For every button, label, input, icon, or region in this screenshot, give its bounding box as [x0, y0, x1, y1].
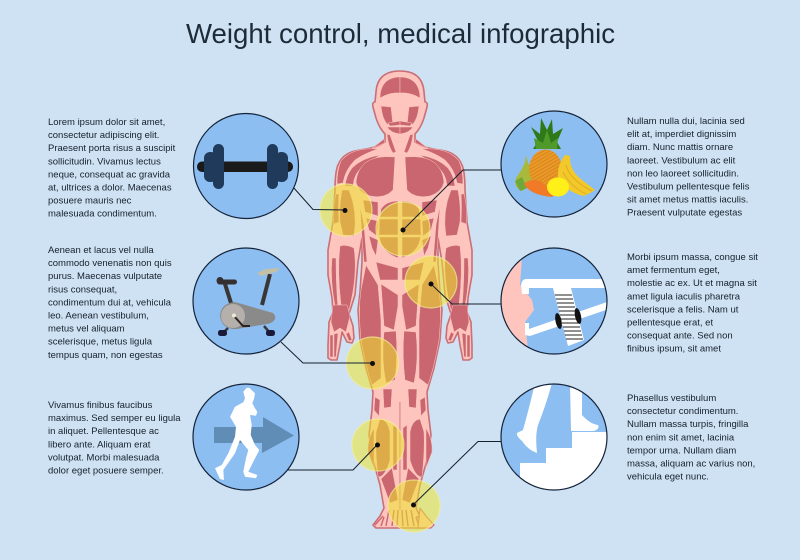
- text block: middle left: metus vel aliquam: [48, 324, 125, 335]
- text block: bottom left: Vivamus finibus faucibus: [48, 400, 153, 411]
- text block: top right: non leo laoreet sollicitudin.: [627, 168, 739, 179]
- text block: bottom right: consectetur condimentum.: [627, 406, 738, 417]
- text block: top left: Praesent porta risus a suscipit: [48, 143, 176, 154]
- text block: middle left: Aenean et lacus vel nulla: [48, 245, 154, 256]
- text block: middle right: amet fermentum eget,: [627, 265, 720, 276]
- leader line dots: [342, 208, 434, 508]
- icon: runner with arrow: [193, 384, 299, 490]
- text block: bottom left: volutpat. Morbi malesuada: [48, 452, 160, 463]
- text block: middle left: scelerisque, metus ligula: [48, 337, 153, 348]
- text block: middle right: amet ligula iaculis pharetra: [627, 291, 741, 302]
- text block: middle left: condimentum dui at, vehicula: [48, 297, 172, 308]
- text block: bottom right: Nullam massa turpis, fringilla: [627, 419, 749, 430]
- text block: middle left: tempus quam, non egestas: [48, 350, 163, 361]
- text block: top left: at, ultrices a dolor. Maecenas: [48, 182, 172, 194]
- text block: top left: posuere mauris nec: [48, 196, 132, 207]
- text block: bottom left: maximus. Sed semper eu ligula: [48, 413, 181, 424]
- text block: top right: Vestibulum pellentesque felis: [627, 182, 750, 192]
- text block: bottom left: in aliquet. Pellentesque ac: [48, 426, 159, 437]
- text block: middle left: leo. Aenean vestibulum,: [48, 310, 149, 322]
- text block: middle right: consequat ante. Sed non: [627, 331, 733, 342]
- icon: exercise bike: [193, 248, 299, 354]
- text block: bottom right: Phasellus vestibulum: [627, 393, 716, 404]
- text block: middle right: scelerisque a felis. Nam ut: [627, 304, 739, 315]
- text block: bottom left: dolor eget posuere semper.: [48, 466, 164, 476]
- text block: top right: diam. Nunc mattis ornare: [627, 142, 733, 153]
- icon: leg press machine: [495, 248, 610, 354]
- text block: middle left: purus. Maecenas vulputate: [48, 271, 162, 282]
- text block: middle left: commodo venenatis non quis: [48, 258, 172, 269]
- text block: middle left: risus consequat,: [48, 284, 117, 295]
- text block: middle right: finibus ipsum, sit amet: [627, 344, 721, 355]
- text block: bottom right: non enim sit amet, lacinia: [627, 432, 735, 443]
- text block: bottom right: vehicula eget nunc.: [627, 472, 709, 483]
- text block: top right: laoreet. Vestibulum ac elit: [627, 155, 736, 166]
- text block: top right: Praesent vulputate egestas: [627, 208, 742, 219]
- text block: top right: sit amet metus mattis iaculis.: [627, 195, 748, 206]
- text block: top left: Lorem ipsum dolor sit amet,: [48, 117, 165, 128]
- anatomical body figure: [328, 71, 472, 528]
- text block: middle right: pellentesque erat, et: [627, 318, 713, 328]
- text block: top left: consectetur adipiscing elit.: [48, 130, 159, 141]
- text block: top left: sollicitudin. Vivamus lectus: [48, 156, 161, 167]
- icon: legs on stairs: [501, 383, 610, 495]
- title: Weight control, medical infographic: [186, 18, 615, 49]
- text block: bottom right: massa, aliquam ac varius non,: [627, 458, 755, 470]
- text block: top right: Nullam nulla dui, lacinia sed: [627, 116, 745, 127]
- highlight zones on the body: [320, 184, 457, 532]
- text block: top left: neque, consequat ac gravida: [48, 169, 171, 180]
- text block: bottom left: libero ante. Aliquam erat: [48, 439, 151, 450]
- text block: bottom right: tempor urna. Nullam diam: [627, 445, 736, 456]
- text block: top left: malesuada condimentum.: [48, 209, 157, 220]
- icon: fruit: [501, 111, 607, 217]
- text block: middle right: molestie ac ex. Ut et magna sit: [627, 278, 757, 289]
- text block: middle right: Morbi ipsum massa, congue sit: [627, 252, 758, 263]
- icon: dumbbell: [194, 114, 298, 218]
- leader lines: [281, 170, 502, 505]
- text block: top right: elit at, imperdiet dignissim: [627, 129, 736, 140]
